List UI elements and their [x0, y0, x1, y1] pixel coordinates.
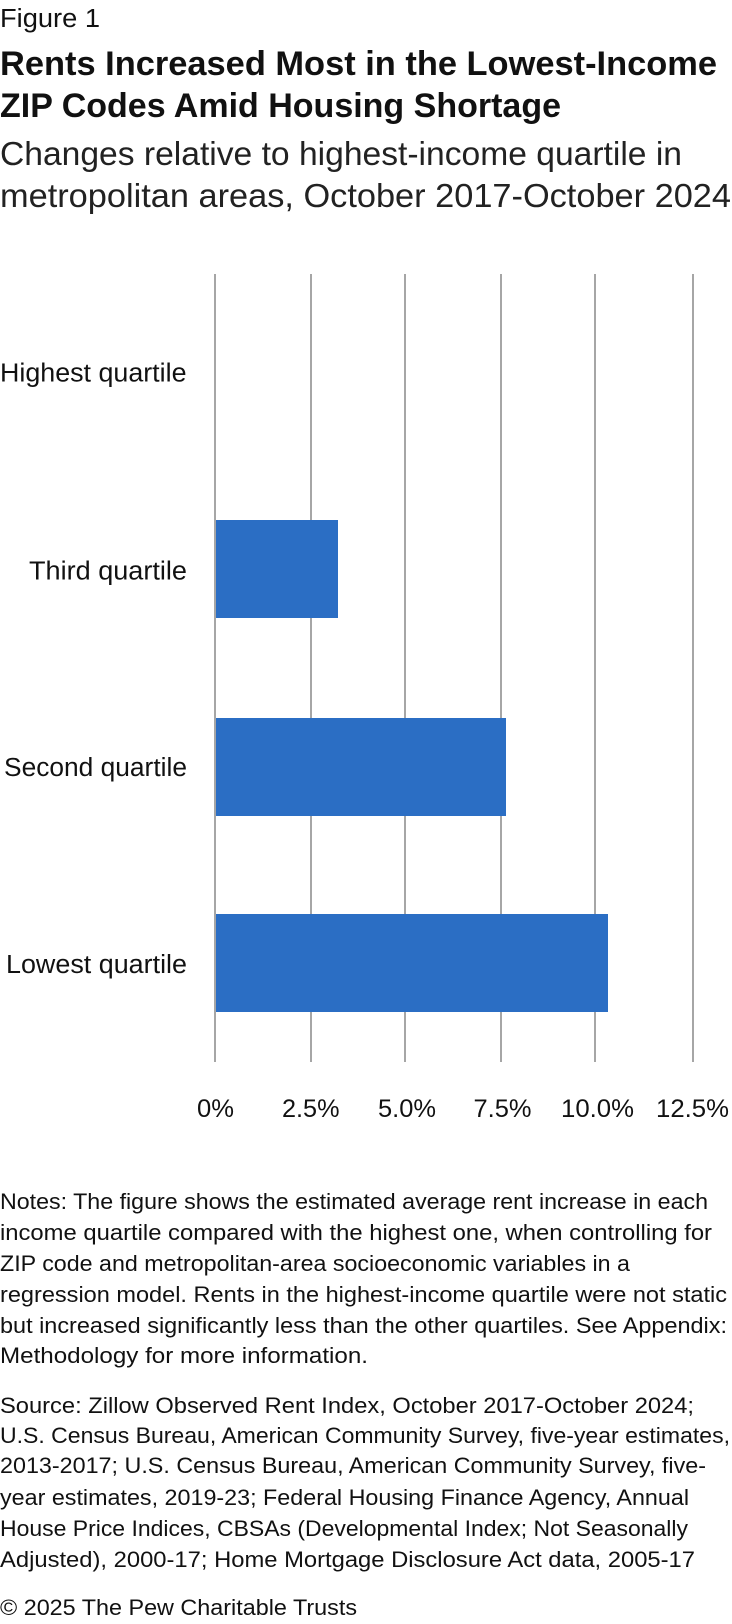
source: Source: Zillow Observed Rent Index, October 2017-October 2024;	[0, 1393, 694, 1418]
title: ZIP Codes Amid Housing Shortage	[0, 87, 561, 125]
bar: lowest quartile	[216, 914, 608, 1012]
source: U.S. Census Bureau, American Community Survey, five-year estimates,	[0, 1423, 730, 1448]
notes: but increased significantly less than the other quartiles. See Appendix:	[0, 1313, 727, 1338]
source: Adjusted), 2000-17; Home Mortgage Disclosure Act data, 2005-17	[0, 1547, 695, 1572]
notes	[0, 1189, 727, 1368]
notes: Methodology for more information.	[0, 1343, 368, 1368]
category labels: Third quartile	[29, 558, 187, 586]
category labels: Highest quartile	[0, 360, 186, 388]
notes: ZIP code and metropolitan-area socioeconomic variables in a	[0, 1251, 631, 1276]
subtitle: metropolitan areas, October 2017-October 2024	[0, 177, 731, 214]
bar: second quartile	[216, 718, 506, 816]
source	[0, 1393, 730, 1572]
copyright: © 2025 The Pew Charitable Trusts	[0, 1595, 357, 1620]
category labels: Lowest quartile	[6, 951, 187, 979]
x-axis labels	[197, 1095, 729, 1123]
source: year estimates, 2019-23; Federal Housing Finance Agency, Annual	[0, 1485, 689, 1510]
x-axis labels: 7.5%	[474, 1095, 532, 1123]
category labels	[0, 360, 187, 979]
title: Rents Increased Most in the Lowest-Income	[0, 45, 717, 83]
notes: regression model. Rents in the highest-income quartile were not static	[0, 1282, 727, 1307]
x-axis labels: 2.5%	[282, 1095, 340, 1123]
bar: third quartile	[216, 520, 338, 618]
x-axis labels: 10.0%	[561, 1095, 634, 1123]
bar chart: rent change by income quartile	[0, 274, 729, 1123]
notes: Notes: The figure shows the estimated average rent increase in each	[0, 1189, 708, 1214]
x-axis labels: 5.0%	[378, 1095, 436, 1123]
x-axis labels: 0%	[197, 1095, 234, 1123]
subtitle: Changes relative to highest-income quartile in	[0, 135, 682, 172]
x-axis labels: 12.5%	[656, 1095, 729, 1123]
source: 2013-2017; U.S. Census Bureau, American Community Survey, five-	[0, 1453, 706, 1478]
source: House Price Indices, CBSAs (Developmental Index; Not Seasonally	[0, 1516, 688, 1541]
subtitle	[0, 135, 731, 214]
notes: income quartile compared with the highest one, when controlling for	[0, 1220, 712, 1245]
title	[0, 45, 717, 125]
category labels: Second quartile	[4, 754, 187, 782]
figure label: Figure 1	[0, 5, 100, 33]
